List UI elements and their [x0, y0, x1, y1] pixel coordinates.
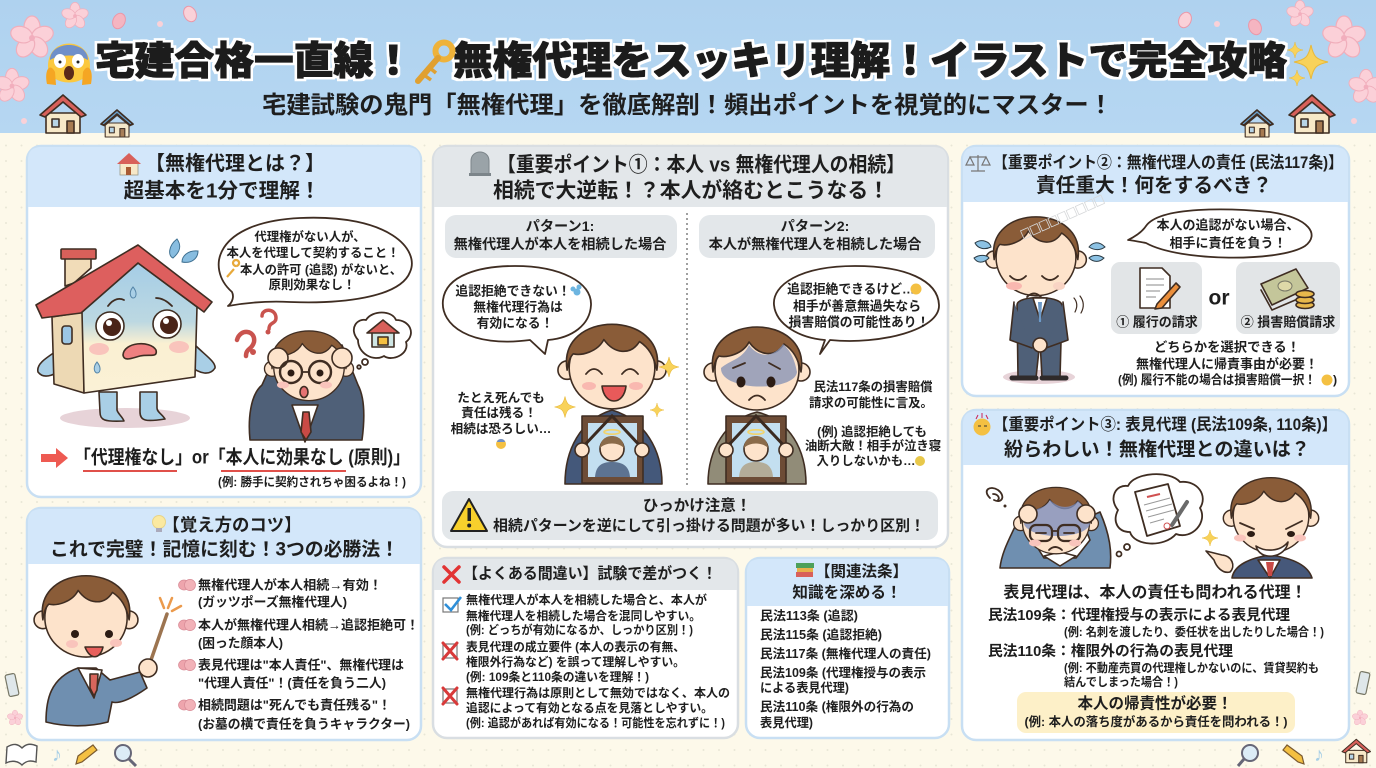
tip 1: [178, 578, 382, 610]
panel heading: 【重要ポイント②：無権代理人の責任 (民法117条)】: [993, 153, 1343, 172]
panel subheading: 超基本を1分で理解！: [124, 180, 320, 202]
arrow: [41, 448, 68, 468]
conclusion text: 無権代理人に帰責事由が必要！: [1136, 356, 1318, 372]
mistake 2: (例: 109条と110条の違いを理解！): [466, 669, 649, 684]
article 109: (例: 名刺を渡したり、委任状を出したりした場合！): [1064, 624, 1324, 639]
pattern 1 header: [445, 215, 677, 258]
text note left: たとえ死んでも: [457, 391, 545, 405]
corner decorations right: ♪: [1314, 744, 1324, 766]
example note: (例: 勝手に契約されちゃ困るよね！): [218, 474, 406, 489]
text note right: 民法117条の損害賠償: [813, 379, 933, 394]
article list: 民法113条 (追認): [760, 608, 858, 623]
text note right: 請求の可能性に言及。: [809, 395, 933, 410]
article list: 民法110条 (権限外の行為の: [760, 699, 914, 714]
panel: key point 3 apparent agency: [962, 410, 1349, 740]
speech bubble left: 追認拒絶できない！: [455, 284, 571, 298]
conclusion text: ): [1333, 373, 1337, 387]
article list: 表見代理): [760, 715, 813, 730]
label: or: or: [1208, 286, 1230, 310]
pattern 2 header: 本人が無権代理人を相続した場合: [709, 236, 921, 253]
option 1: performance: [1111, 262, 1202, 334]
panel subheading: 紛らわしい！無権代理との違いは？: [1004, 438, 1310, 460]
subtitle: 宅建試験の鬼門「無権代理」を徹底解剖！頻出ポイントを視覚的にマスター！: [262, 92, 1113, 119]
callout: trap warning: 相続パターンを逆にして引っ掛ける問題が多い！しっかり区別！: [493, 516, 925, 534]
pattern 1 header: パターン1:: [526, 219, 594, 235]
tip 1: 無権代理人が本人相続→有効！: [198, 578, 382, 592]
title: 宅建合格一直線！ 無権代理をスッキリ理解！イラストで完全攻略: [95, 40, 1287, 84]
pattern 1 header: 無権代理人が本人を相続した場合: [454, 236, 666, 253]
panel heading: 【関連法条】: [815, 562, 908, 580]
speech bubble left: 有効になる！: [477, 316, 553, 330]
corner decorations left: ♪: [52, 744, 62, 766]
portrait frame: [724, 416, 788, 483]
icon: sweat drops: [570, 284, 582, 296]
ghost boxes: [1021, 195, 1105, 239]
speech bubble: 代理権がない人が、: [254, 229, 366, 244]
panel subheading: 知識を深める！: [792, 582, 902, 602]
icon: light bulb: [152, 516, 166, 532]
tip 2: [178, 618, 419, 650]
speech bubble: 原則効果なし！: [269, 278, 355, 292]
option 2: damages: [1236, 262, 1340, 334]
icon: small house: [117, 153, 141, 175]
article 110: [988, 642, 1319, 689]
tip 4: [178, 698, 410, 732]
speech bubble: 本人を代理して契約すること！: [226, 245, 400, 260]
panel: related articles: [746, 558, 949, 738]
corner decorations right: [1238, 671, 1371, 766]
panel subheading: 責任重大！何をするべき？: [1036, 175, 1272, 197]
icon: scales: [966, 155, 990, 171]
article 110: 結んでしまった場合！): [1064, 674, 1178, 689]
tip 3: "代理人責任"！(責任を負う二人): [198, 676, 386, 690]
pattern 2 header: パターン2:: [781, 219, 849, 235]
panel heading: 【覚え方のコツ】: [162, 515, 302, 535]
thought cloud: [354, 312, 411, 369]
text note left: [451, 391, 551, 449]
illustration: teacher with pointer: [34, 576, 181, 726]
header decorations left: [0, 2, 199, 137]
key statement: 表見代理は、本人の責任も問われる代理！: [1003, 584, 1307, 602]
illustration: happy person with portrait: [554, 324, 679, 484]
article list: 民法109条 (代理権授与の表示: [760, 665, 926, 680]
conclusion text: どちらかを選択できる！: [1154, 338, 1300, 354]
speech bubble right: 相手が善意無過失なら: [793, 298, 921, 314]
tip 4: 相続問題は"死んでも責任残る"！: [198, 698, 391, 712]
panel: common mistakes: [433, 558, 738, 738]
article list: による表見代理): [760, 680, 849, 695]
article list: 民法115条 (追認拒絶): [760, 627, 882, 642]
illustration: stressed person: [987, 487, 1111, 568]
icon: books: [796, 563, 814, 577]
icon: screaming face: [46, 44, 92, 85]
tip 3: 表見代理は"本人責任"、無権代理は: [198, 658, 404, 672]
summary line: 「代理権なし」or「本人に効果なし (原則)」: [74, 446, 410, 468]
text note right: 入りしないかも…: [816, 454, 916, 468]
article list: 民法117条 (無権代理人の責任): [760, 646, 931, 661]
callout: trap warning: [442, 491, 938, 540]
panel subheading: これで完璧！記憶に刻む！3つの必勝法！: [50, 538, 399, 560]
tip 4: (お墓の横で責任を負うキャラクター): [198, 716, 410, 732]
text note left: 相続は恐ろしい…: [451, 421, 551, 436]
illustration: worried house: [36, 239, 215, 428]
panel: what is unauthorized agency: [27, 146, 421, 497]
icon: gravestone: [469, 152, 491, 176]
panel heading: 【よくある間違い】試験で差がつく！: [463, 564, 717, 582]
callout: trap warning: ひっかけ注意！: [643, 496, 751, 514]
mistake 1: 無権代理人が本人を相続した場合と、本人が: [466, 592, 707, 607]
tip list: [178, 578, 419, 732]
panel: key point 2 liability: [962, 146, 1349, 396]
speech bubble: 本人の追認がない場合、: [1156, 218, 1300, 232]
text note right: (例) 追認拒絶しても: [817, 424, 927, 439]
tip 3: [178, 658, 404, 690]
mistake 3: 無権代理行為は原則として無効ではなく、本人の: [466, 685, 730, 700]
speech bubble right: [774, 266, 939, 354]
article list: [760, 608, 931, 730]
text note right: 油断大敵！相手が泣き寝: [805, 438, 941, 453]
speech bubble: [219, 218, 412, 306]
mistake 2: 表見代理の成立要件 (本人の表示の有無、: [466, 639, 685, 654]
pattern 2 header: [699, 215, 935, 258]
speech bubble left: 無権代理行為は: [473, 300, 563, 314]
speech bubble right: 損害賠償の可能性あり！: [789, 314, 929, 330]
mistake 1: 無権代理人を相続した場合を混同しやすい。: [466, 608, 701, 623]
conclusion text: (例) 履行不能の場合は損害賠償一択！: [1118, 372, 1316, 387]
article 110: (例: 不動産売買の代理権しかないのに、賃貸契約も: [1064, 660, 1319, 675]
text note left: 責任は残る！: [461, 405, 537, 420]
tip 1: (ガッツポーズ無権代理人): [198, 594, 347, 610]
portrait frame: [580, 416, 644, 483]
illustration: sly person: [1202, 478, 1319, 578]
icon: mind blown face: [974, 413, 990, 436]
option 2: damages: ② 損害賠償請求: [1241, 314, 1335, 330]
text note right: [805, 379, 941, 468]
callout: owner's fault: [1017, 692, 1295, 733]
corner decorations left: [5, 673, 136, 766]
speech bubble: 相手に責任を負う！: [1169, 236, 1287, 250]
panel heading: 【重要ポイント③: 表見代理 (民法109条, 110条)】: [993, 415, 1337, 434]
thought cloud with contract: [1113, 474, 1203, 556]
callout: owner's fault: (例: 本人の落ち度があるから責任を問われる！): [1024, 714, 1288, 729]
header band: [0, 0, 1376, 137]
illustration: confused person with glasses: [237, 310, 411, 442]
panel: key point 1 inheritance: [433, 146, 948, 547]
tip 2: 本人が無権代理人相続→追認拒絶可！: [198, 618, 419, 632]
article 109: [988, 606, 1324, 639]
tip 2: (困った顔本人): [198, 636, 283, 650]
red underlines: [83, 470, 346, 472]
mistake 2: [443, 639, 685, 684]
header decorations right: [1176, 0, 1376, 137]
icon: sparkles: [1287, 42, 1328, 86]
icon: warning triangle: [451, 499, 487, 531]
speech bubble: 本人の許可 (追認) がないと、: [240, 262, 402, 277]
panel: memory tips: [27, 508, 421, 740]
mistake 2: 権限外行為など) を誤って理解しやすい。: [466, 654, 685, 669]
icon: red cross: [444, 567, 459, 582]
panel heading: 【無権代理とは？】: [145, 152, 325, 175]
mistake 3: 追認によって有効となる点を見落としやすい。: [466, 700, 713, 715]
speech bubble: [1128, 209, 1312, 258]
article 109: 民法109条：代理権授与の表示による表見代理: [988, 606, 1290, 624]
option 1: performance: ① 履行の請求: [1116, 314, 1198, 330]
mistake 1: [443, 592, 707, 637]
mistake 3: (例: 追認があれば有効になる！可能性を忘れずに！): [466, 715, 725, 730]
conclusion text: [1118, 338, 1337, 387]
illustration: gloomy person with portrait: [704, 327, 810, 484]
icon: key: [418, 42, 452, 81]
article 110: 民法110条：権限外の行為の表見代理: [988, 642, 1233, 660]
speech bubble right: 追認拒絶できるけど…: [787, 282, 915, 296]
panel subheading: 相続で大逆転！？本人が絡むとこうなる！: [493, 178, 889, 202]
illustration: bowing person: [974, 217, 1105, 384]
mistake 1: (例: どっちが有効になるか、しっかり区別！): [466, 622, 693, 637]
speech bubble left: [443, 266, 591, 354]
callout: owner's fault: 本人の帰責性が必要！: [1077, 694, 1233, 712]
panel heading: 【重要ポイント①：本人 vs 無権代理人の相続】: [497, 154, 905, 176]
mistake 3: [443, 685, 730, 730]
